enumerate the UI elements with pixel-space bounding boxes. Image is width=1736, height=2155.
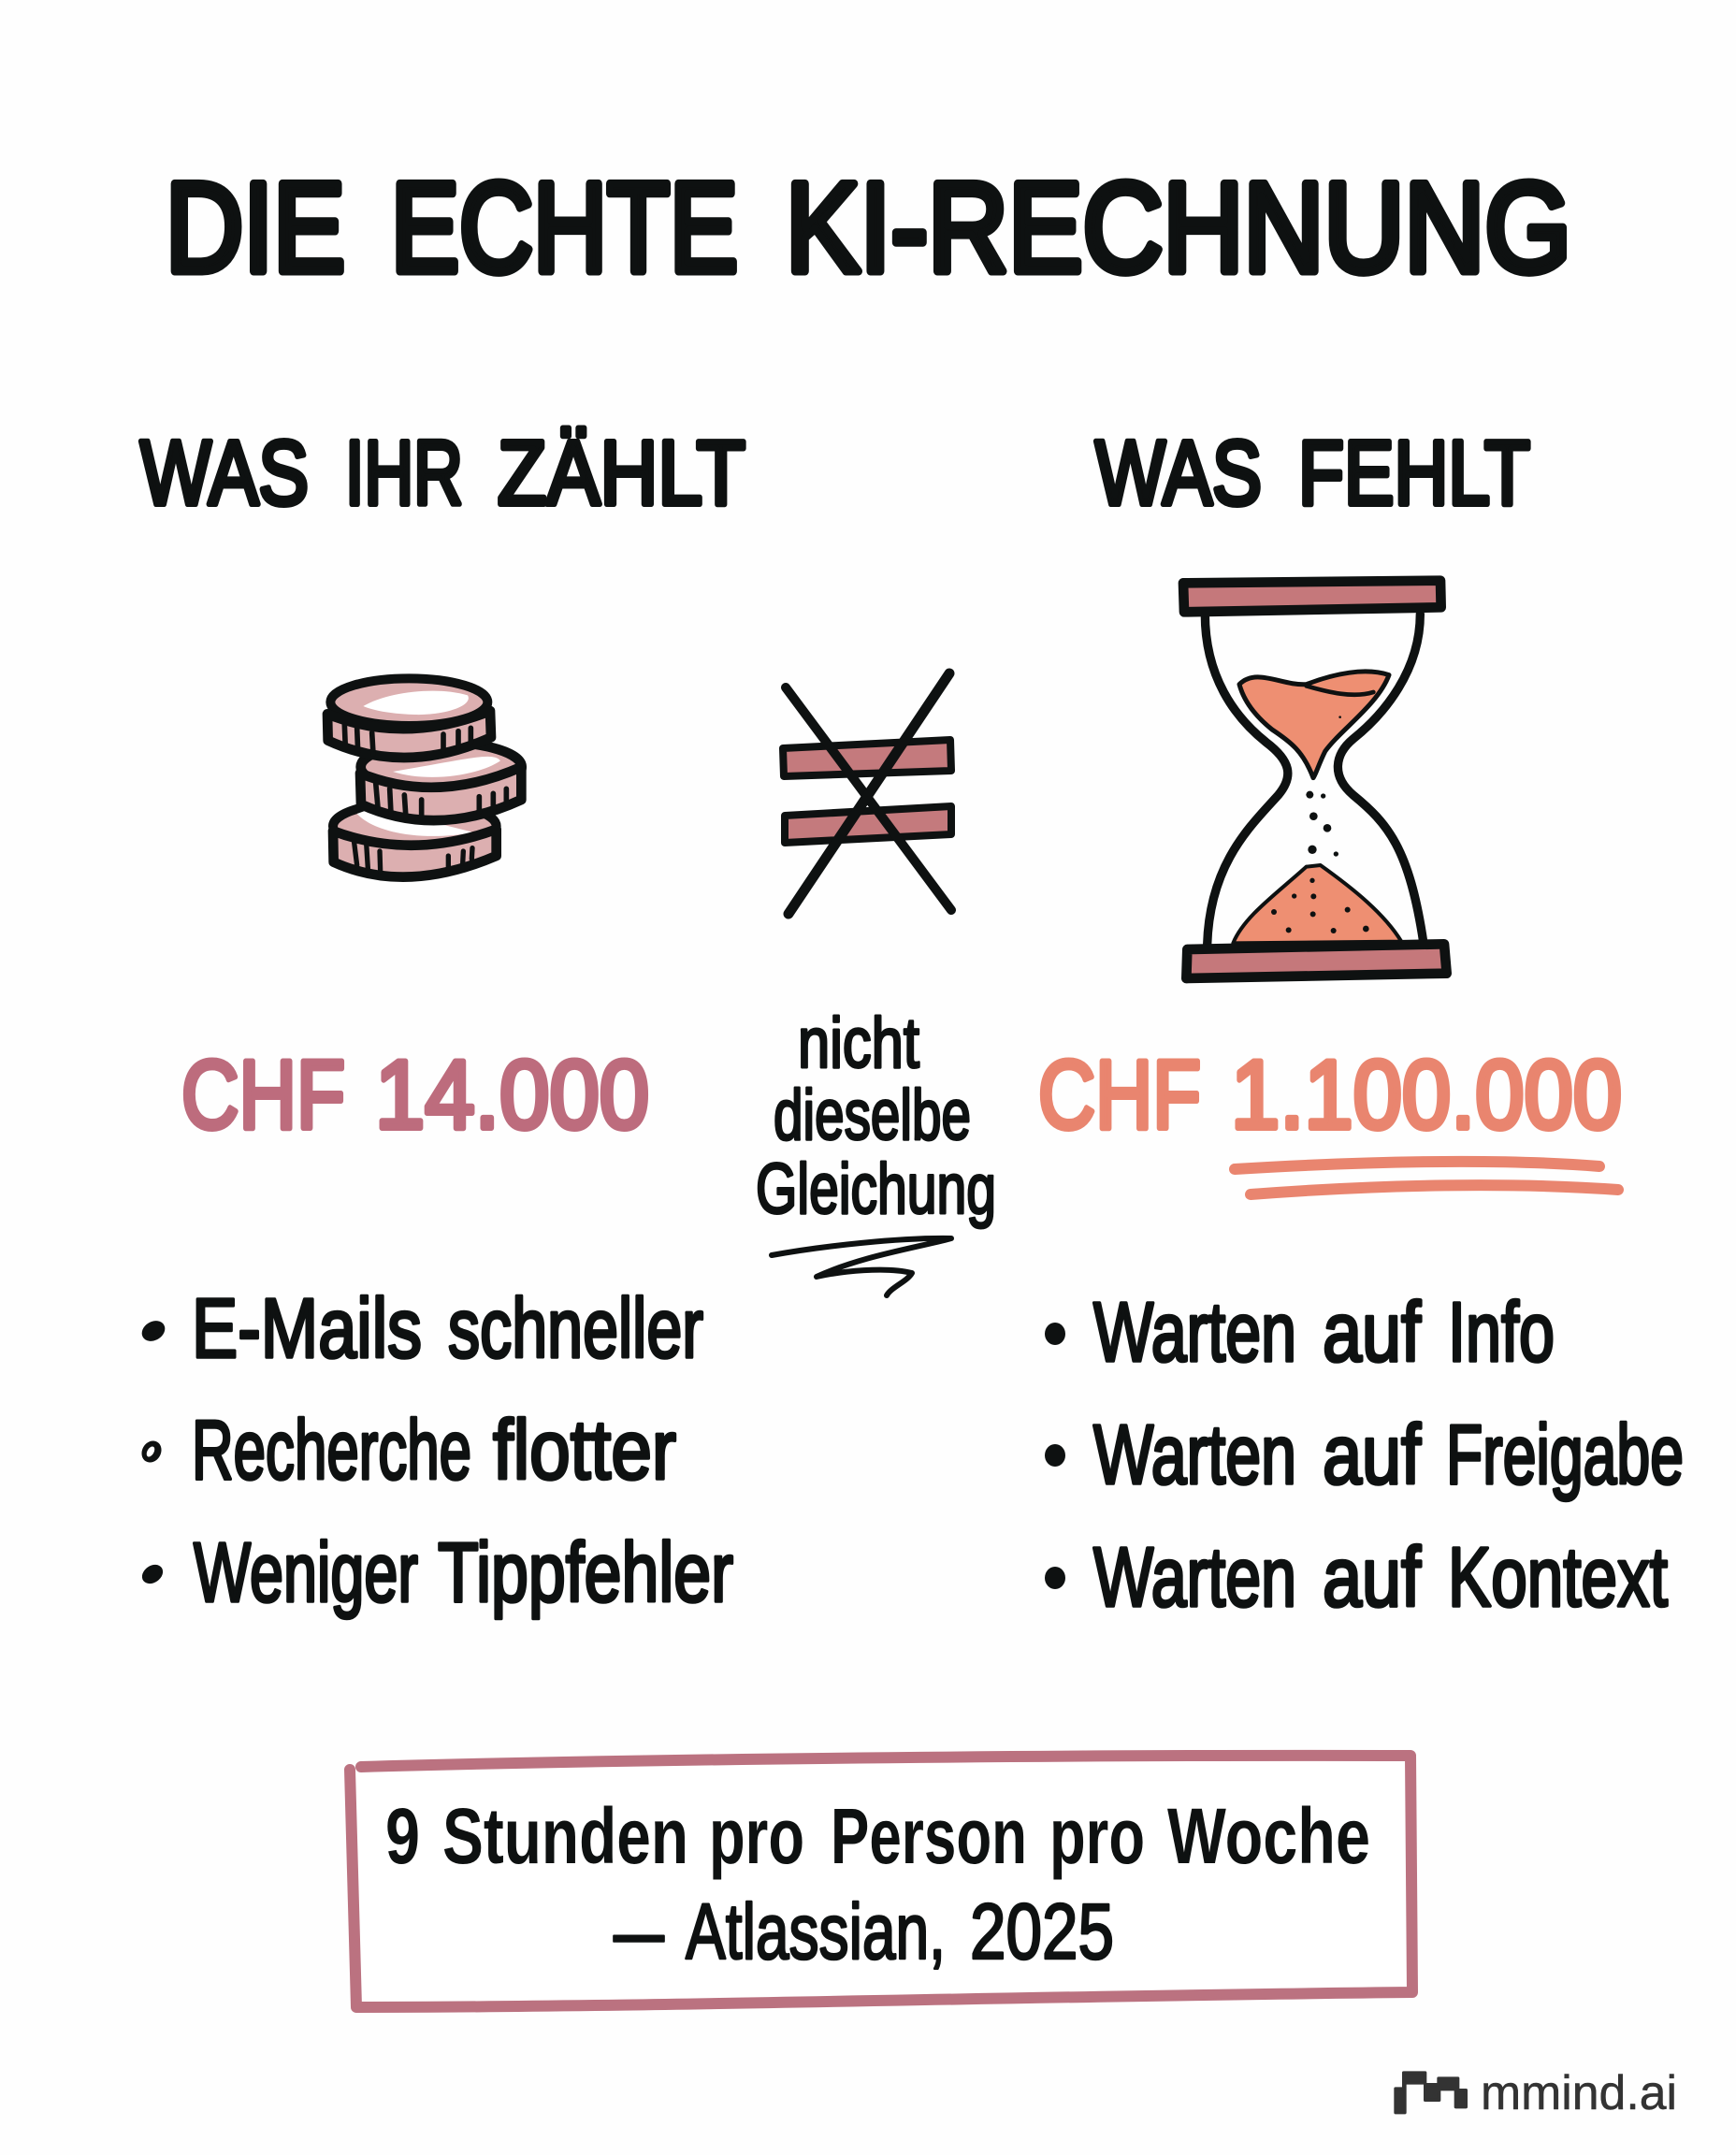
- title: KI-RECHNUNG: [786, 156, 1571, 298]
- bullet list: left: [137, 1282, 733, 1620]
- heading: was ihr zählt: IHR: [345, 422, 463, 524]
- callout statistic: Person: [831, 1792, 1027, 1880]
- bullet list: right: Warten: [1093, 1286, 1296, 1380]
- bottom bar: [1186, 944, 1447, 978]
- heading: was fehlt: [1095, 422, 1530, 524]
- heading: was ihr zählt: ZÄHLT: [498, 422, 745, 524]
- amount: chf 14.000: [181, 1041, 649, 1150]
- icon: hourglass: [1183, 581, 1447, 978]
- callout source: [614, 1887, 1114, 1975]
- callout statistic: pro: [709, 1792, 804, 1880]
- panel: was fehlt: [1038, 422, 1684, 1625]
- callout source: 2025: [970, 1887, 1114, 1975]
- panel: not equal: [756, 673, 996, 1295]
- bullet list: left: schneller: [448, 1282, 703, 1376]
- bullet list: left: Tippfehler: [438, 1526, 733, 1620]
- heading: was fehlt: WAS: [1095, 422, 1262, 524]
- callout statistic: 9: [385, 1792, 420, 1880]
- heading: was ihr zählt: WAS: [140, 422, 309, 524]
- upper sand: [1239, 672, 1389, 778]
- bottom coin: [333, 802, 497, 877]
- bullet list: right: [1045, 1286, 1684, 1625]
- logo: mmind.ai: mmind.ai: [1481, 2066, 1677, 2120]
- icon: crossed equals sign: [783, 673, 951, 914]
- lower sand: [1233, 865, 1401, 943]
- bullet list: right: auf: [1323, 1286, 1422, 1380]
- title: ECHTE: [391, 156, 738, 298]
- note: nicht dieselbe gleichung: Gleichung: [756, 1150, 996, 1229]
- heading: was ihr zählt: [140, 422, 745, 524]
- bullet list: right: Info: [1448, 1286, 1555, 1380]
- glass outline: [1205, 615, 1424, 945]
- bullet list: right: auf: [1323, 1409, 1422, 1502]
- callout statistic: [385, 1792, 1370, 1880]
- bullet list: right: Warten: [1093, 1531, 1296, 1625]
- amount: chf 14.000: CHF: [181, 1041, 345, 1150]
- double underline: [1235, 1162, 1618, 1194]
- note: nicht dieselbe gleichung: nicht: [798, 1004, 919, 1083]
- falling grains: [1271, 716, 1369, 933]
- title: [166, 156, 1571, 298]
- panel: was ihr zählt: [137, 422, 745, 1620]
- scribble underline: [772, 1238, 951, 1295]
- title: DIE: [166, 156, 345, 298]
- callout statistic: Woche: [1167, 1792, 1370, 1880]
- bullet list: left: flotter: [493, 1404, 676, 1497]
- amount: chf 1.100.000: [1038, 1041, 1622, 1150]
- bullet list: left: Weniger: [194, 1526, 418, 1620]
- callout statistic: pro: [1049, 1792, 1145, 1880]
- note: nicht dieselbe gleichung: dieselbe: [774, 1076, 971, 1155]
- heading: was fehlt: FEHLT: [1298, 422, 1530, 524]
- callout source: —: [614, 1887, 664, 1975]
- bullet list: left: Recherche: [192, 1404, 471, 1497]
- bullet list: right: auf: [1323, 1531, 1422, 1625]
- callout statistic: Stunden: [442, 1792, 688, 1880]
- callout source: Atlassian,: [686, 1887, 946, 1975]
- amount: chf 1.100.000: CHF: [1038, 1041, 1201, 1150]
- middle coin: [360, 742, 522, 820]
- bullet list: right: Warten: [1093, 1409, 1296, 1502]
- amount: chf 14.000: 14.000: [375, 1041, 649, 1150]
- top coin: [327, 678, 491, 758]
- bullet list: right: Kontext: [1448, 1531, 1668, 1625]
- top bar: [1183, 581, 1441, 612]
- note: nicht dieselbe gleichung: [756, 1004, 996, 1229]
- amount: chf 1.100.000: 1.100.000: [1231, 1041, 1622, 1150]
- icon: coin stack: [327, 678, 522, 877]
- bullet list: left: E-Mails: [192, 1282, 422, 1376]
- callout box: [350, 1756, 1412, 2007]
- logo: mmind.ai: [1396, 2066, 1677, 2120]
